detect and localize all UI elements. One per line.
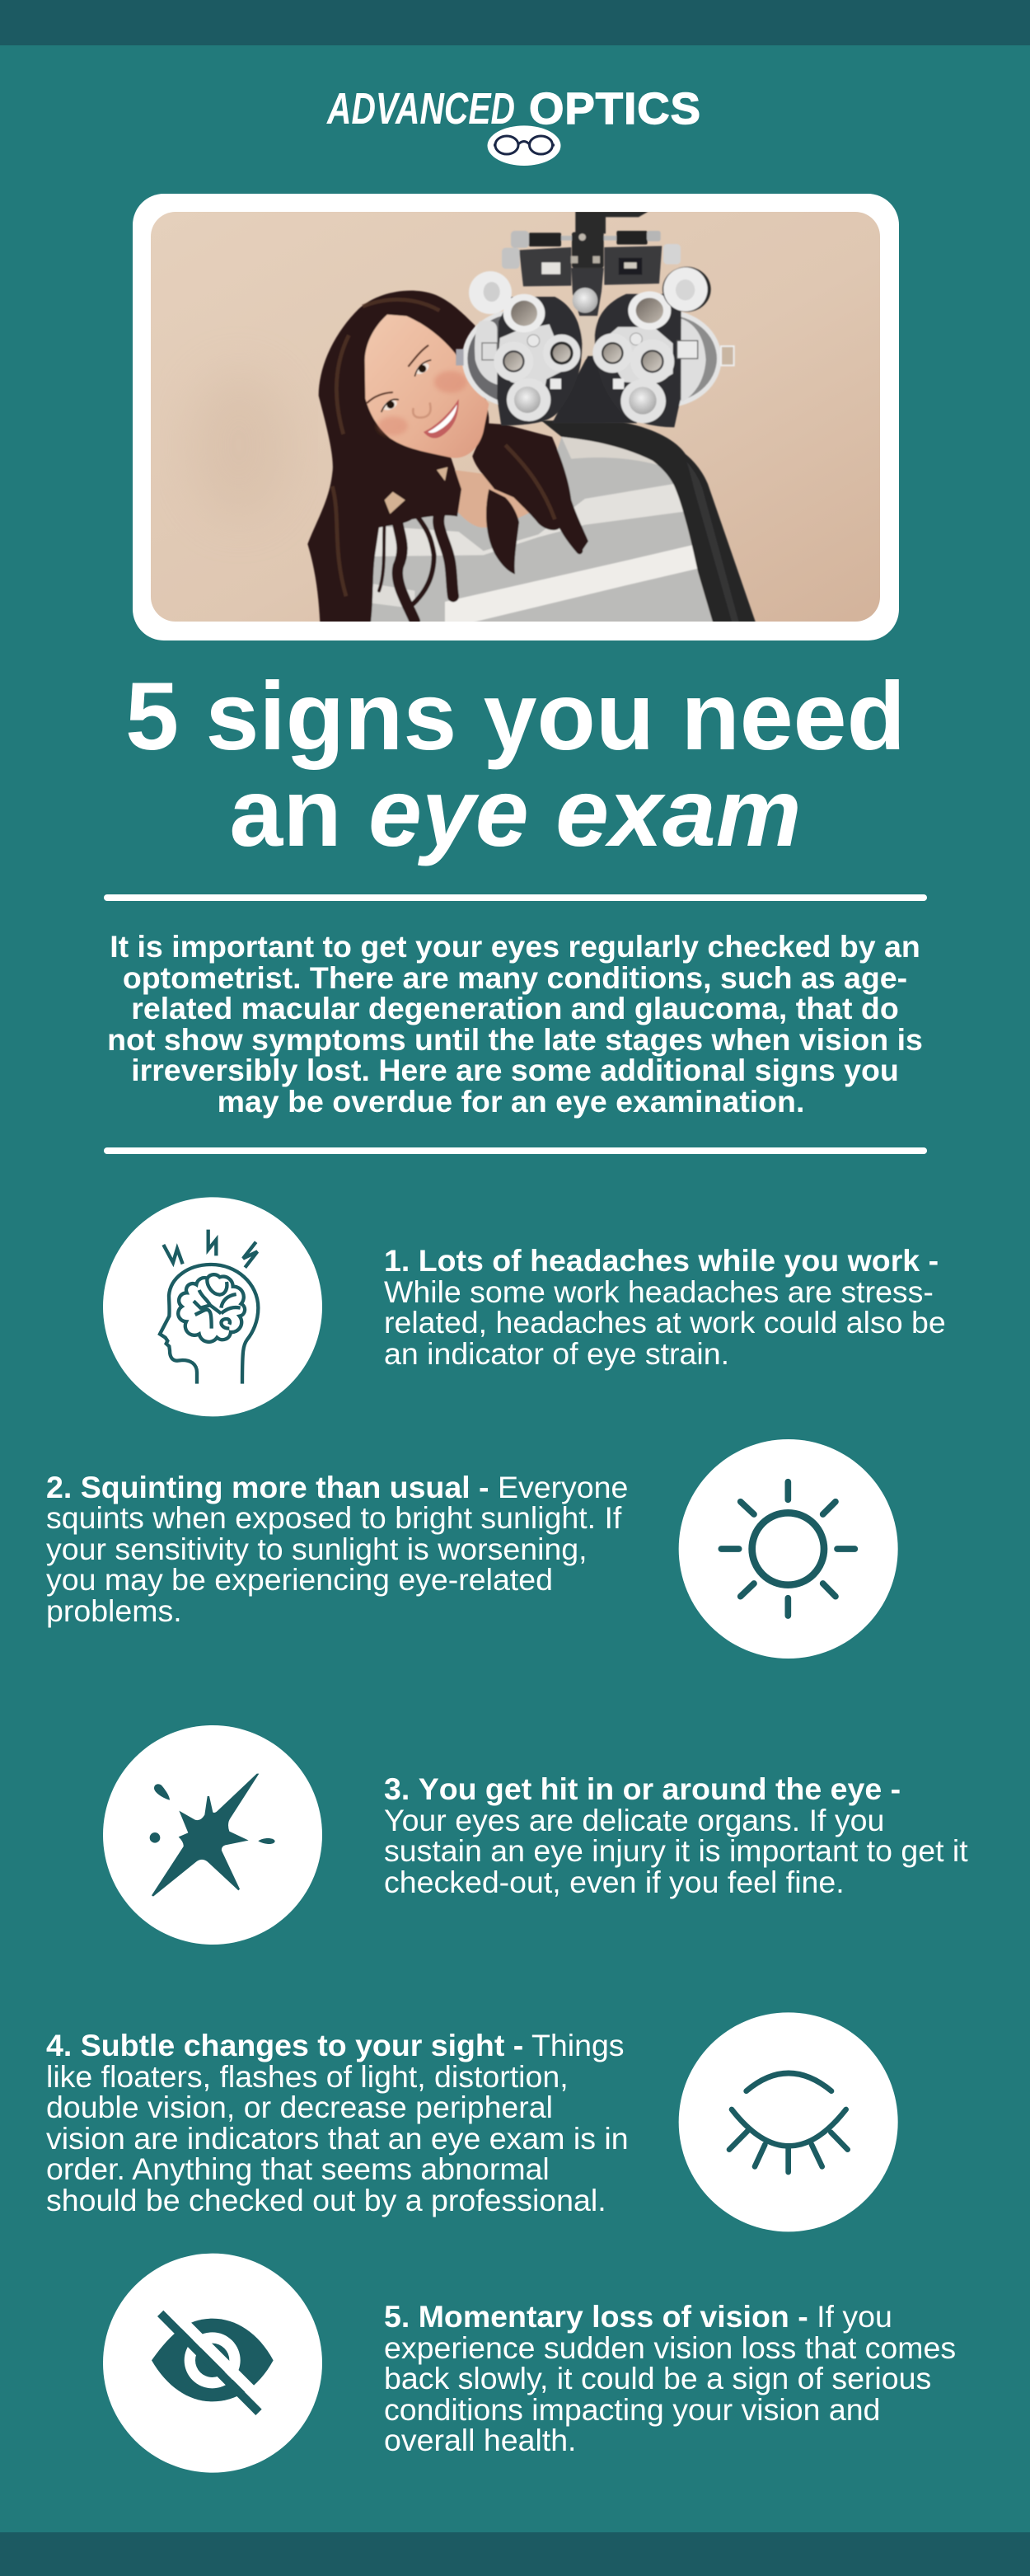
intro text	[107, 929, 923, 1118]
title: an eye exam	[229, 758, 802, 866]
sign 1 text: related, headaches at work could also be	[384, 1305, 946, 1340]
top band	[0, 0, 1030, 45]
sign 5 text: experience sudden vision loss that comes	[384, 2330, 956, 2364]
intro text: irreversibly lost. Here are some additional signs you	[131, 1053, 899, 1087]
sign 1 text: While some work headaches are stress-	[384, 1274, 934, 1309]
chair	[541, 420, 756, 622]
logo	[325, 84, 701, 166]
sign 2 text: squints when exposed to bright sunlight. If	[46, 1500, 621, 1535]
sign 2 text: your sensitivity to sunlight is worsening,	[46, 1532, 588, 1566]
intro text: related macular degeneration and glaucoma, that do	[131, 991, 899, 1025]
sign 4 text: vision are indicators that an eye exam is in	[46, 2120, 629, 2155]
right housing	[678, 312, 721, 407]
intro text: It is important to get your eyes regularly checked by an	[110, 929, 920, 964]
sign 3 text: Your eyes are delicate organs. If you	[384, 1802, 884, 1837]
intro text: may be overdue for an eye examination.	[218, 1083, 804, 1118]
phoropter	[456, 212, 734, 427]
sign 3 text: 3. You get hit in or around the eye -	[384, 1771, 901, 1806]
sign 2 text: you may be experiencing eye-related	[46, 1562, 553, 1597]
sign 5 text: 5. Momentary loss of vision - If you	[384, 2299, 892, 2334]
hair	[307, 290, 588, 622]
sign 5 text	[384, 2299, 956, 2457]
sign 2 text	[46, 1469, 628, 1627]
icon: headache	[103, 1197, 322, 1416]
sign 5 text: back slowly, it could be a sign of serious	[384, 2361, 931, 2395]
photo: woman at phoropter	[133, 194, 899, 640]
icon: closed eye	[679, 2012, 898, 2232]
intro text: not show symptoms until the late stages when vision is	[107, 1022, 923, 1057]
face	[365, 315, 489, 457]
sign 1 text	[384, 1243, 946, 1370]
sign 4 text: double vision, or decrease peripheral	[46, 2090, 553, 2124]
icon: sun	[679, 1439, 898, 1659]
logo: OPTICS	[529, 84, 701, 134]
sign 2 text: problems.	[46, 1593, 182, 1627]
sign 2 text: 2. Squinting more than usual - Everyone	[46, 1469, 628, 1504]
icon: impact splat	[103, 1725, 322, 1945]
sign 4 text: should be checked out by a professional.	[46, 2183, 606, 2217]
sign 3 text: sustain an eye injury it is important to get it	[384, 1833, 968, 1868]
sign 5 text: overall health.	[384, 2423, 576, 2457]
sign 4 text: order. Anything that seems abnormal	[46, 2151, 550, 2186]
title	[125, 662, 906, 866]
sign 5 text: conditions impacting your vision and	[384, 2392, 880, 2427]
sweater	[368, 431, 725, 624]
sign 3 text: checked-out, even if you feel fine.	[384, 1865, 845, 1899]
sign 4 text	[46, 2028, 629, 2217]
bottom band	[0, 2532, 1030, 2576]
brows and eyes	[368, 345, 428, 402]
logo: ADVANCED	[325, 84, 515, 134]
divider bottom	[104, 1147, 927, 1154]
intro text: optometrist. There are many conditions, such as age-	[123, 960, 907, 994]
sign 1 text: 1. Lots of headaches while you work -	[384, 1243, 939, 1278]
sign 1 text: an indicator of eye strain.	[384, 1335, 729, 1370]
neck	[453, 470, 533, 528]
smile	[424, 399, 459, 438]
sign 3 text	[384, 1771, 968, 1899]
divider top	[104, 894, 927, 901]
sign 4 text: 4. Subtle changes to your sight - Things	[46, 2028, 625, 2062]
left housing	[461, 311, 503, 406]
icon: crossed-out eye	[103, 2254, 322, 2473]
title: 5 signs you need	[125, 662, 906, 770]
sign 4 text: like floaters, flashes of light, distortion,	[46, 2059, 569, 2094]
photo frame	[133, 194, 899, 640]
